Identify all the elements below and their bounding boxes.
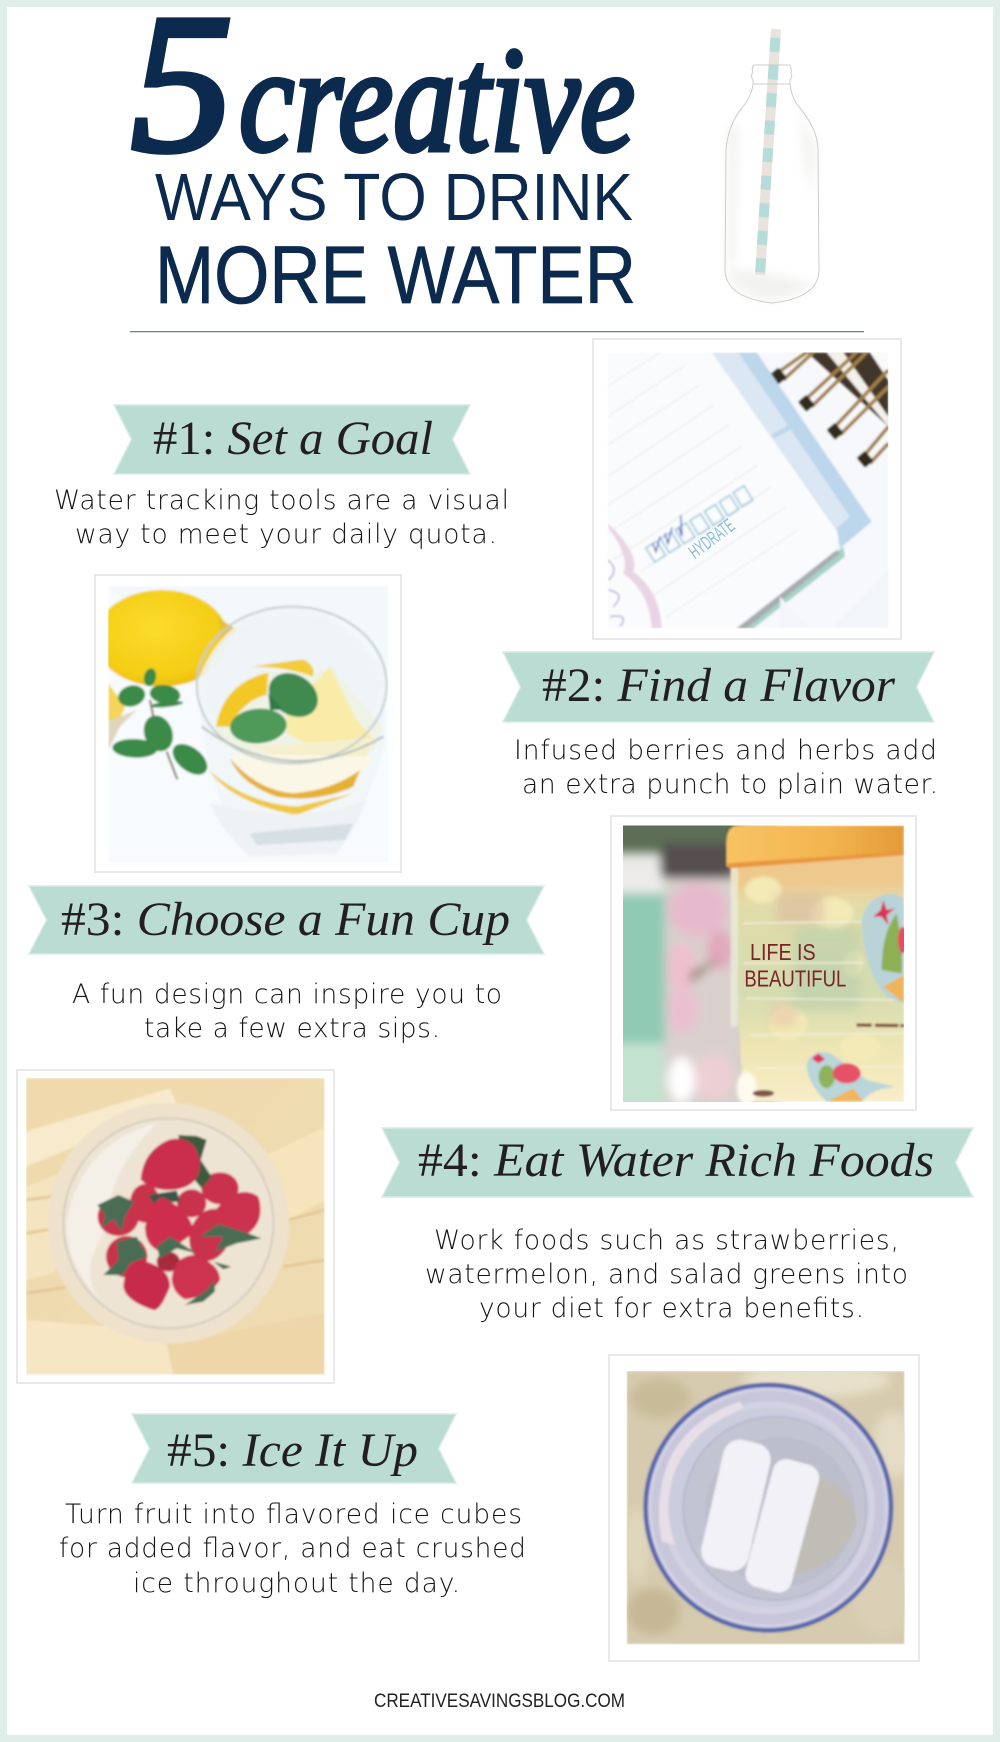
title: ways to drink: WAYS TO DRINK xyxy=(155,160,633,235)
photo frame: ice xyxy=(609,1355,919,1661)
body text 1: Water tracking tools are a visual xyxy=(54,485,509,516)
photo: water tracker notebook xyxy=(608,352,888,628)
banner 3 xyxy=(29,886,544,954)
body text 3: take a few extra sips. xyxy=(144,1013,440,1044)
photo frame: lemon water xyxy=(95,575,401,872)
body text 4 xyxy=(425,1225,908,1324)
photo: life is beautiful cup: LIFE IS xyxy=(750,939,816,965)
banner 2 xyxy=(503,652,934,722)
title xyxy=(131,0,636,321)
body text 4: Work foods such as strawberries, xyxy=(434,1225,899,1256)
body text 2: an extra punch to plain water. xyxy=(522,769,938,800)
photo: bowl of strawberries xyxy=(26,1078,325,1375)
body text 4: watermelon, and salad greens into xyxy=(425,1259,908,1290)
body text 2 xyxy=(514,735,938,800)
photo frame: fun cup xyxy=(610,810,916,1127)
photo: water tracker notebook: HYDRATE xyxy=(685,515,739,563)
body text 2: Infused berries and herbs add xyxy=(514,735,937,766)
body text 1: way to meet your daily quota. xyxy=(75,519,497,550)
heading 4: #4: Eat Water Rich Foods xyxy=(418,1134,934,1187)
body text 5: Turn fruit into flavored ice cubes xyxy=(65,1499,522,1530)
banner 1 xyxy=(114,405,470,474)
heading 2: #2: Find a Flavor xyxy=(542,659,895,712)
body text 5: ice throughout the day. xyxy=(133,1568,460,1599)
photo: lemon water glass xyxy=(95,586,388,862)
photo frame: notebook xyxy=(593,339,901,639)
body text 3: A fun design can inspire you to xyxy=(72,979,502,1010)
heading 3: #3: Choose a Fun Cup xyxy=(61,893,510,946)
body text 3 xyxy=(72,979,502,1044)
body text 5 xyxy=(59,1499,526,1599)
photo: ice cubes in cup xyxy=(623,1363,913,1644)
body text 5: for added flavor, and eat crushed xyxy=(59,1533,526,1564)
body text 4: your diet for extra benefits. xyxy=(479,1293,864,1324)
title: creative: creative xyxy=(239,17,635,183)
banner 4 xyxy=(382,1128,973,1197)
heading 5: #5: Ice It Up xyxy=(167,1424,418,1477)
title: more water: MORE WATER xyxy=(155,230,636,321)
banner 5 xyxy=(132,1414,456,1483)
heading 1: #1: Set a Goal xyxy=(153,412,433,465)
footer url: CREATIVESAVINGSBLOG.COM xyxy=(374,1690,625,1712)
photo: life is beautiful cup: BEAUTIFUL xyxy=(744,966,846,992)
body text 1 xyxy=(54,485,509,550)
photo: life is beautiful cup xyxy=(623,826,904,1102)
icon: bottle with striped straw xyxy=(725,29,819,303)
photo frame: strawberries xyxy=(17,1070,334,1383)
